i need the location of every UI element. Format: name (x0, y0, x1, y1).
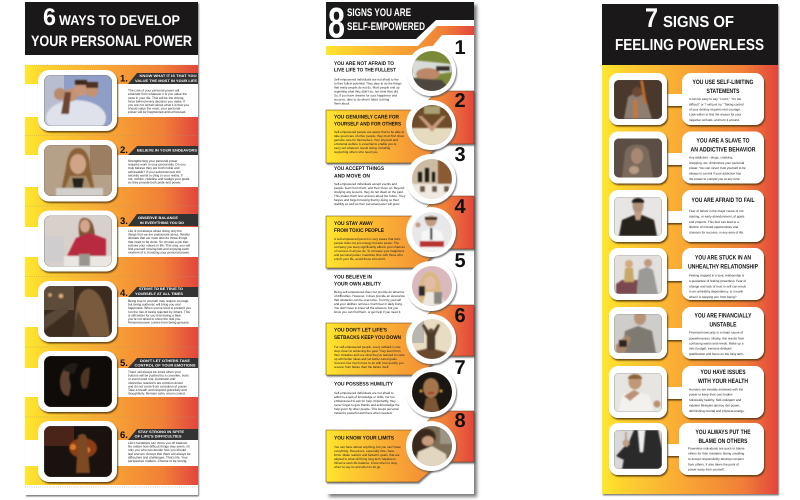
body text 1 (128, 88, 189, 114)
body text 1: emanate from whatever it is you value the (128, 92, 187, 96)
body text: power to keep their own bodies (689, 392, 733, 396)
title (694, 312, 752, 328)
number 4: 4. (120, 288, 128, 299)
title 4: YOU STAY AWAY (334, 221, 374, 227)
body text 2: secretly wants to cling to your reality. If (128, 173, 183, 177)
photo: worried man (614, 311, 662, 353)
title: YOU ARE STUCK IN AN (695, 254, 751, 262)
title bar 4 (128, 287, 198, 297)
body text 3: people, learn from them, and then move on. Beyond (334, 186, 405, 190)
number 2: 2. (120, 145, 128, 156)
body text (689, 273, 746, 299)
title: YOU USE SELF-LIMITING (692, 79, 754, 86)
title bar 5 (128, 358, 198, 368)
body text 5: There will always be times when your (128, 370, 182, 374)
title 3: AND MOVE ON (334, 174, 370, 180)
title bar 1 (128, 73, 198, 84)
body text 6: For self-empowered people, every setback is one (334, 345, 401, 349)
body text 2: requires work in your personality. Do you (128, 163, 186, 167)
body text 1: regretting what they didn't do, not what they did. (334, 90, 399, 94)
body text 1: power will be fragmented and unfocused. (128, 110, 186, 114)
body text 3: things that we are passionate about. Reality (128, 233, 190, 237)
sign 1 (609, 73, 764, 125)
title: YOU ARE A SLAVE TO (696, 138, 750, 144)
title (696, 429, 750, 445)
sign 6 (609, 366, 764, 418)
body text 4: people drain not just energy but also power. The (334, 241, 399, 245)
body text: the power to compel you at any time. (689, 177, 740, 181)
body text: of your destiny requires real courage. (689, 108, 741, 112)
title 1: LIVE LIFE TO THE FULLEST (334, 68, 397, 74)
heading: 7 signs (602, 3, 778, 65)
title: BLAME ON OTHERS (698, 438, 748, 445)
body text 6: their mistakes and use what they've learned to come (334, 353, 405, 357)
title: UNSTABLE (710, 322, 736, 328)
title (690, 138, 756, 154)
body text 3: stability as well as their personal power will grow. (334, 202, 400, 206)
number 5: 5 (454, 250, 466, 272)
body text: indolent lifestyles destroy this power, (689, 403, 740, 407)
title 7: YOU POSSESS HUMILITY (334, 382, 393, 388)
sign 7 (334, 357, 466, 417)
item 5 (38, 351, 198, 412)
body text: Feeling trapped in a toxic relationship is (689, 273, 745, 277)
title bar 5: CONTROL OF YOUR EMOTIONS (134, 363, 196, 367)
body text 5: and your abilities removes much fear in daily living. (334, 302, 403, 306)
body text 1: Self-empowered individuals are not afraid to live (334, 78, 399, 82)
title: YOU ALWAYS PUT THE (696, 429, 750, 436)
number 6: 6. (120, 430, 128, 441)
body text 6: No matter how difficult things may seem, it's (128, 445, 190, 449)
body text 2: Self-empowered people are aware that to be able to (334, 130, 404, 134)
body text 5: thoughtfully. Remain calm, return control. (128, 392, 186, 396)
body text 8 (334, 445, 401, 469)
number 2: 2 (454, 90, 466, 112)
number 3: 3 (454, 144, 466, 166)
title: WITH YOUR HEALTH (698, 378, 748, 385)
photo: woman in red jacket (44, 216, 112, 267)
body text (689, 97, 744, 122)
heading: 6 ways (25, 2, 198, 55)
body text 1: success, dare to do what it takes to bring (334, 98, 390, 102)
body text 7: Self-empowered individuals are not afraid to (334, 391, 394, 395)
body text: It can be easy to say "I can't," "It's too (689, 97, 741, 101)
body text: confusing wants and needs. Make up a (689, 342, 744, 346)
title bar 3 (128, 214, 198, 226)
title bar 2: BELIEVE IN YOUR ENDEAVORS (137, 148, 198, 152)
title 5: YOUR OWN ABILITY (334, 282, 381, 288)
title bar 3: IN EVERYTHING YOU DO (140, 221, 184, 225)
body text 1: The core of your personal power will (128, 88, 179, 92)
title bar 1: VALUE THE MOST IN YOUR LIFE (135, 79, 198, 83)
body text 5: know you can find them, or get help if you need it. (334, 310, 401, 314)
heading: 8 signs (326, 0, 474, 48)
body text 3: Self-empowered individuals accept events and (334, 182, 397, 186)
photo: man hiding face (614, 197, 662, 236)
body text: Financial insecurity is a major cause of (689, 330, 743, 334)
body text: Humans are innately endowed with the (689, 387, 743, 391)
title 4: FROM TOXIC PEOPLE (334, 228, 384, 234)
body text 2: achievable? If your subconscious still (128, 170, 181, 174)
heading: 8 signs: SIGNS YOU ARE (347, 7, 411, 19)
sign 6 (334, 305, 466, 369)
body text 3: that need to be done. So choose a job that (128, 240, 188, 244)
number 5: 5. (120, 358, 128, 369)
item 2 (38, 140, 198, 202)
title bar 5: DON'T LET OTHERS TAKE (140, 359, 191, 363)
body text 6: perspective matters. Choose to be strong. (128, 459, 187, 463)
title (688, 254, 758, 270)
sign 3 (334, 144, 466, 206)
body text 4: is still better for you than being a fake (128, 313, 181, 317)
title 6: SETBACKS KEEP YOU DOWN (334, 335, 401, 341)
body text 2 (128, 159, 190, 185)
body text: in an unhealthy dependency. Is it worth (689, 290, 743, 294)
body text 4: and personal power, maximize time with those who (334, 253, 403, 257)
body text 6: feel and act. Accept that there will always be (128, 452, 191, 456)
body text (689, 330, 745, 356)
body text: power. You can never trust yourself to be (689, 166, 746, 170)
title bar 4: YOURSELF AT ALL TIMES (135, 292, 184, 296)
body text: a guarantee of feeling powerless. Fear of (689, 279, 746, 283)
body text 8: Observe work-life balance. Know when to stop, (334, 461, 398, 465)
title 2 (334, 114, 401, 128)
body text 5: Take a breath and respond gracefully and (128, 388, 187, 392)
body text 5: and do not come from a position of power. (128, 384, 188, 388)
photo: angry man at desk (412, 212, 452, 252)
connector (666, 94, 683, 106)
photo: man with raised arms (412, 319, 452, 360)
body text 5 (128, 370, 189, 396)
body text: change and lack of trust in self can result (689, 284, 746, 288)
body text 7: networks powerful and there when needed. (334, 411, 392, 415)
title 6 (334, 328, 401, 341)
title 8: YOU KNOW YOUR LIMITS (334, 436, 395, 442)
connector (666, 153, 683, 165)
body text 2 (334, 130, 405, 154)
body text 4 (334, 237, 405, 261)
item 3 (38, 210, 198, 272)
body text: always in control if your addiction has (689, 172, 741, 176)
photo: couple in shadow (44, 356, 112, 407)
title bar 6: STAY STRONG IN SPITE (138, 430, 185, 434)
sign 2 (334, 90, 466, 154)
orange band 2 (326, 91, 474, 163)
body text 1: force behind every decision you make. If (128, 99, 185, 103)
body text: holistically healthy. Self-indulgent and (689, 398, 741, 402)
title: YOU ARE AFRAID TO FAIL (692, 197, 755, 204)
title 1: YOU ARE NOT AFRAID TO (334, 61, 394, 67)
number 3: 3. (120, 216, 128, 227)
body text 5 (334, 290, 405, 314)
body text 7: admit to a lack of knowledge or skills, nor too (334, 395, 395, 399)
body text 2: emotional welfare is essential to enable you to (334, 142, 397, 146)
body text 2: supporting others who need you. (334, 150, 378, 154)
number 1: 1 (454, 37, 466, 59)
panel: 8 signs you are self-empowered (326, 0, 474, 494)
body text 8: limits. Make realistic and fantastic goals, that are (334, 453, 400, 457)
title 5: YOU BELIEVE IN (334, 274, 372, 280)
gradient background bands (25, 65, 198, 487)
body text 4: you're not afraid to show the real you. (128, 317, 181, 321)
photo: family (44, 75, 112, 126)
body text 3: dictates that we must also do those things (128, 236, 188, 240)
title bar 2 (128, 146, 198, 155)
title 3 (334, 166, 384, 180)
sign 5 (334, 250, 466, 314)
body text 4: A self-empowered person is very aware that toxic (334, 237, 401, 241)
body text (689, 209, 745, 234)
body text 2: genuine care for themselves. Your physical and (334, 138, 398, 142)
heading: 6 ways: 6 (43, 4, 56, 31)
photo: woman by window (44, 286, 112, 337)
heading: 7 signs: SIGNS OF (663, 14, 734, 31)
photo: woman smoking (614, 138, 662, 178)
body text 4: run the risk of being rejected by others. This (128, 310, 190, 314)
body text 2: carry out whatever needs doing, including (334, 146, 391, 150)
number 6: 6 (454, 305, 466, 327)
body text 6 (128, 441, 191, 463)
body text 3: forgive and forget knowing that by doing so their (334, 198, 399, 202)
body text 2: not, rethink, redefine and realign your goals (128, 177, 190, 181)
connector (666, 387, 683, 399)
body text 3: Life is not always about doing only the (128, 229, 182, 233)
title: AN ADDICTIVE BEHAVIOR (690, 146, 756, 154)
title 3: YOU ACCEPT THINGS (334, 166, 384, 172)
item 1 (38, 70, 198, 136)
body text: lifetime of missed opportunities and (689, 225, 738, 229)
sign 3 (609, 190, 764, 242)
photo: woman relaxing (412, 51, 452, 92)
title bar 4: STRIVE TO BE TRUE TO (139, 287, 183, 291)
heading: 6 ways: YOUR PERSONAL POWER (31, 33, 192, 50)
body text 4: Personal power comes from being genuine. (128, 321, 190, 325)
body text 6: only you who can decide how you should (128, 448, 186, 452)
body text 1 (334, 78, 402, 106)
body text 1: that many people do not do. Most people end up (334, 86, 400, 90)
body text: power away from yourself. (688, 468, 725, 472)
body text 5: or even loved one. Automatic and (128, 377, 176, 381)
photo: woman at laptop (44, 145, 112, 196)
photo: chess pieces (412, 159, 452, 200)
body text 8: everything. Resources, especially time, have (334, 449, 395, 453)
body text 2: take good care of other people, they must first show (334, 134, 405, 138)
body text 2: so they provide both pride and power. (128, 181, 181, 185)
body text 1: So, if you have dreams for your happiness and (334, 94, 397, 98)
body text: Fear of failure is the major cause of not (689, 209, 744, 213)
body text 1: you are not certain about what it is that you (128, 103, 189, 107)
body text 5: Being self-empowered does not provide an absence (334, 290, 405, 294)
body text (689, 156, 746, 181)
item 4 (38, 281, 198, 342)
item 6 (38, 421, 198, 482)
body text 4 (128, 299, 191, 325)
photo: woman portrait (412, 372, 452, 412)
body text 8: when to say no and when to let go. (334, 465, 381, 469)
connector (666, 328, 683, 340)
body text: Any addiction - drugs, smoking, (689, 156, 733, 160)
sign 7 (609, 423, 764, 475)
connector (666, 211, 683, 223)
body text 5: of difficulties. However, it does provide an assurance (334, 294, 405, 298)
number 1: 1. (120, 74, 128, 84)
body text: chances for success, in any area of life. (689, 230, 744, 234)
orange band 8 (326, 411, 474, 482)
title bar 6: OF LIFE'S DIFFICULTIES (134, 434, 182, 438)
body text: starting, or early abandonment, of goals (689, 214, 745, 218)
body text 3: moment of it, boosting your personal power. (128, 251, 190, 255)
body text 3: find yourself moving fast and enjoying each (128, 247, 189, 251)
body text 3 (334, 182, 406, 206)
body text 1: them about. (334, 102, 350, 106)
body text 5: buttons will be pushed by a coworker, boss (128, 374, 189, 378)
number 7: 7 (454, 357, 466, 379)
photo: man eating (614, 373, 662, 412)
body text 7: help given by other people. This keeps personal (334, 407, 399, 411)
body text 4: happiness. When you've tried to pretend you (128, 306, 191, 310)
body text 8: You can have almost anything, but you can't have (334, 445, 401, 449)
body text 8: aligned to what will bring long-term happiness. (334, 457, 397, 461)
photo: man in suit pointing (614, 430, 662, 469)
body text 4: enrich your life, avoid those who don't. (334, 257, 386, 261)
body text 4: of success in all you do. To increase your happiness (334, 249, 405, 253)
body text 2: Strengthening your personal power (128, 159, 179, 163)
photo: woman in landscape (412, 426, 452, 468)
panel: 7 signs of feeling powerless (602, 3, 778, 494)
body text: and projects. This fear can lead to a (689, 220, 739, 224)
body text: powerlessness. Mostly, this results from (689, 336, 745, 340)
number 4: 4 (454, 196, 466, 218)
body text 6: recover from failure than the failure itself. (334, 365, 389, 369)
header ribbon (326, 26, 474, 55)
body text 3: This makes them less anxious about the future. They (334, 194, 406, 198)
sign 8 (334, 410, 466, 471)
title bar 1: KNOW WHAT IT IS THAT YOU (140, 74, 197, 78)
body text: negative self-talk, and turn it around. (689, 118, 740, 122)
body text 6: step closer to achieving the goal. They learn from (334, 349, 401, 353)
body text 6: difficulties and challenges. That's life. Your (128, 455, 189, 459)
body text 6: up with better ideas and set better-tuned goals. (334, 357, 398, 361)
body text 4: company you keep significantly affects your chances (334, 245, 405, 249)
body text 7 (334, 391, 400, 415)
heading: 8 signs: SELF-EMPOWERED (347, 21, 425, 33)
body text 3 (128, 229, 190, 255)
title: YOU HAVE ISSUES (700, 369, 746, 376)
photo: heart hands (412, 105, 452, 146)
photo: woman with phone (412, 266, 452, 306)
number 8: 8 (454, 410, 466, 432)
connector (666, 444, 681, 456)
body text 4: Being true to yourself may require courage, (128, 299, 189, 303)
body text: difficult" or "I will just try." Taking control (689, 102, 744, 106)
photo: person in dark (614, 80, 662, 119)
body text: strict budget, exercise delayed (689, 346, 732, 350)
body text: what it is keeping you from being? (689, 295, 737, 299)
heading: 6 ways: WAYS TO DEVELOP (59, 12, 180, 28)
title bar 3: OBSERVE BALANCE (138, 216, 179, 220)
body text 1: most in your life. This will be the driving (128, 96, 184, 100)
body text: gratification and focus on the long term. (689, 352, 744, 356)
heading: 7 signs: 7 (645, 3, 658, 33)
body text: Look within to find the reason for your (689, 113, 741, 117)
body text 6: Success has much more to do with how quickly you (334, 361, 404, 365)
photo: couple back to back (614, 255, 662, 294)
body text: to accept responsibility destroys respect (688, 457, 744, 461)
title 6: YOU DON'T LET LIFE'S (334, 328, 387, 334)
title (692, 79, 754, 95)
sign 1 (334, 37, 466, 106)
body text: diminishing mental and physical energy. (689, 409, 745, 413)
body text 4: but being authentic will bring you real (128, 303, 181, 307)
body text 7: never forget to give thanks and acknowledge the (334, 403, 400, 407)
sign 5 (609, 307, 764, 359)
body text 3: studying any lessons, they do not dwell on the past. (334, 190, 404, 194)
heading: 8 signs: 8 (328, 0, 345, 48)
body text 5: You don't have to know all the answers, but you (334, 306, 398, 310)
body text: Powerless individuals are quick to blame (688, 446, 745, 450)
title bar 6 (128, 429, 198, 440)
body text 6 (334, 345, 405, 369)
title 2: YOU GENUINELY CARE FOR (334, 114, 399, 120)
body text: others for their mistakes. Being unwilling (688, 452, 744, 456)
body text 5: that obstacles can be overcome. Trust by yourself (334, 298, 401, 302)
connector (666, 269, 683, 281)
body text 1: to their fullest potential. They dare to do the things (334, 82, 402, 86)
title: UNHEALTHY RELATIONSHIP (688, 264, 758, 270)
title 5 (334, 274, 381, 288)
body text 2: truly believe they are both noble and (128, 166, 180, 170)
photo: woman with fire (44, 426, 112, 477)
body text 1: should value the most, your personal (128, 107, 180, 111)
panel: 6 ways to develop your personal power (25, 2, 198, 495)
title: STATEMENTS (706, 88, 740, 95)
body text (689, 387, 745, 413)
sign 4 (334, 196, 466, 261)
body text (688, 446, 745, 472)
title (698, 369, 748, 385)
title 4 (334, 221, 384, 234)
body text 5: instinctive reactions are emotion driven (128, 381, 183, 385)
orange band 4 (326, 196, 474, 268)
body text 7: embarrassed to ask for help. Importantly, they (334, 399, 396, 403)
body text: from others. It also takes the point of (688, 462, 739, 466)
sign 2 (609, 132, 764, 184)
body text 3: echoes your values in life. This way, you will (128, 243, 190, 247)
orange band 6 (326, 305, 474, 375)
body text 6: Life's hardships can throw you off balance. (128, 441, 188, 445)
body text: shopping, etc. diminishes your personal (689, 161, 744, 165)
title 1 (334, 61, 397, 74)
heading: 7 signs: FEELING POWERLESS (615, 37, 764, 54)
title: YOU ARE FINANCIALLY (694, 312, 752, 320)
title 2: YOURSELF AND FOR OTHERS (334, 122, 401, 128)
sign 4 (609, 248, 764, 300)
